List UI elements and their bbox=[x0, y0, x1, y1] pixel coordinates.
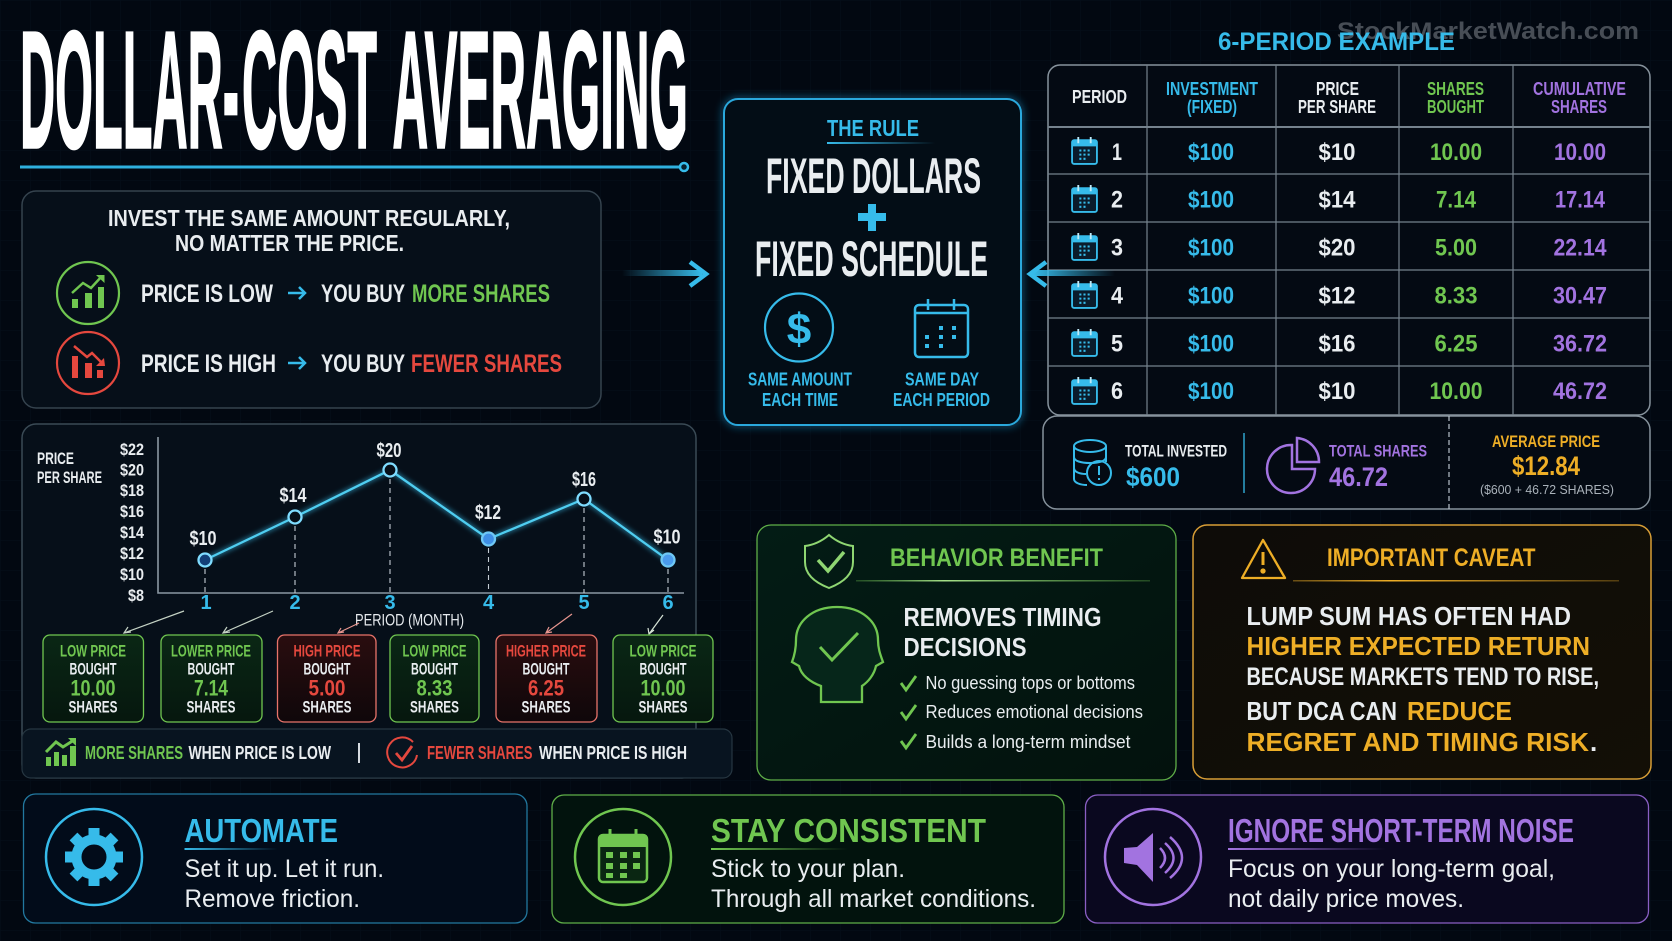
table header: BOUGHT bbox=[1427, 97, 1484, 117]
table row 2: 2 bbox=[1111, 186, 1123, 214]
y axis labels: $16 bbox=[120, 502, 144, 521]
y axis labels: $8 bbox=[128, 586, 144, 605]
y axis labels: $18 bbox=[120, 481, 144, 500]
icon: price high bbox=[57, 332, 119, 394]
panel: price chart bbox=[22, 424, 732, 778]
icon: head with check bbox=[792, 607, 883, 702]
row: price low: YOU BUY bbox=[321, 280, 405, 308]
table row 6: 46.72 bbox=[1553, 378, 1607, 405]
table row 4: 8.33 bbox=[1434, 282, 1478, 310]
y axis labels: $22 bbox=[120, 440, 144, 459]
rule heading: THE RULE bbox=[827, 115, 919, 141]
rule formula bbox=[755, 148, 988, 287]
table header: SHARES bbox=[1551, 97, 1607, 117]
table row 4: $12 bbox=[1318, 282, 1356, 310]
table row 2: $100 bbox=[1188, 186, 1234, 214]
card: period 1: SHARES bbox=[68, 698, 118, 716]
table row 5: 5 bbox=[1111, 330, 1123, 358]
table row 5: $100 bbox=[1188, 330, 1234, 358]
card: period 1: LOW PRICE bbox=[60, 642, 126, 660]
x axis labels: 3 bbox=[384, 592, 396, 614]
title: COST bbox=[242, 0, 377, 184]
card: period 4: LOW PRICE bbox=[402, 642, 466, 660]
point labels: $14 bbox=[280, 485, 307, 507]
line chart bbox=[158, 437, 684, 593]
card: period 5: SHARES bbox=[522, 698, 570, 716]
total shares: 46.72 bbox=[1329, 462, 1388, 492]
table row 6: 6 bbox=[1111, 378, 1123, 405]
table row 2 bbox=[1072, 185, 1606, 214]
consistent text: Stick to your plan. bbox=[711, 855, 905, 883]
benefit checklist bbox=[901, 673, 1143, 752]
card: period 5: HIGHER PRICE bbox=[506, 642, 586, 660]
card: period 4: 8.33 bbox=[416, 676, 452, 700]
point labels: $20 bbox=[376, 440, 402, 462]
text: AVERAGING bbox=[392, 0, 688, 184]
benefit statement bbox=[904, 602, 1102, 662]
noise text: Focus on your long-term goal, bbox=[1228, 855, 1555, 883]
caveat text: REGRET AND TIMING RISK bbox=[1246, 727, 1589, 757]
y axis labels: $10 bbox=[120, 565, 144, 584]
automate text: Remove friction. bbox=[184, 885, 360, 913]
point labels bbox=[190, 440, 680, 550]
icon: price low bbox=[57, 262, 119, 324]
x axis labels: 5 bbox=[578, 592, 590, 614]
card: period 2: BOUGHT bbox=[188, 660, 235, 678]
total shares: TOTAL SHARES bbox=[1329, 442, 1427, 460]
table row 3: 3 bbox=[1111, 234, 1123, 262]
table row 2: 7.14 bbox=[1436, 186, 1477, 214]
table row 2: $14 bbox=[1318, 186, 1356, 214]
heading: 6-period example: 6-PERIOD EXAMPLE bbox=[1218, 28, 1455, 56]
table row 1: 1 bbox=[1112, 139, 1122, 166]
row: price high: PRICE IS HIGH bbox=[141, 350, 276, 378]
consistent text: STAY CONSISTENT bbox=[711, 812, 986, 849]
average price: ($600 + 46.72 SHARES) bbox=[1480, 482, 1614, 497]
benefit statement: DECISIONS bbox=[904, 632, 1026, 662]
point labels: $16 bbox=[572, 469, 596, 491]
legend strip bbox=[22, 729, 732, 778]
title: DOLLAR- bbox=[20, 0, 239, 184]
card: period 2 bbox=[161, 635, 262, 722]
table row 1: $100 bbox=[1188, 139, 1234, 166]
row: price low: MORE SHARES bbox=[412, 280, 550, 308]
card: period 1: BOUGHT bbox=[70, 660, 117, 678]
consistent text bbox=[711, 812, 1036, 913]
automate text: AUTOMATE bbox=[184, 812, 338, 849]
caveat text: . bbox=[1590, 727, 1597, 757]
card: period 1: 10.00 bbox=[70, 676, 116, 700]
table row 1: $10 bbox=[1318, 139, 1356, 166]
point labels: $10 bbox=[654, 526, 680, 548]
automate text bbox=[184, 812, 384, 913]
card: period 3: BOUGHT bbox=[304, 660, 351, 678]
table row 3: $20 bbox=[1318, 234, 1356, 262]
table row 3: 5.00 bbox=[1435, 234, 1477, 262]
same amount label bbox=[748, 370, 852, 410]
table row 4: 4 bbox=[1111, 282, 1124, 310]
table row 6: $100 bbox=[1188, 378, 1234, 405]
table row 6: 10.00 bbox=[1430, 378, 1482, 405]
card: period 2: 7.14 bbox=[194, 676, 229, 700]
icon: gear bbox=[46, 809, 142, 905]
icon: calendar bbox=[915, 299, 968, 357]
table row 4 bbox=[1072, 281, 1607, 310]
total invested: TOTAL INVESTED bbox=[1125, 442, 1227, 460]
total shares bbox=[1329, 442, 1427, 492]
panel: automate bbox=[24, 794, 527, 923]
definition text: NO MATTER THE PRICE. bbox=[175, 230, 404, 256]
table bbox=[1048, 65, 1650, 415]
table header: PRICE bbox=[1316, 79, 1359, 99]
caveat text: LUMP SUM HAS OFTEN HAD bbox=[1246, 601, 1571, 631]
same amount label: EACH TIME bbox=[762, 390, 838, 410]
caveat text: HIGHER EXPECTED RETURN bbox=[1246, 631, 1590, 661]
row: price low: PRICE IS LOW bbox=[141, 280, 273, 308]
x axis labels bbox=[200, 592, 674, 614]
table row 3: 22.14 bbox=[1554, 234, 1607, 262]
table row 3: $100 bbox=[1188, 234, 1234, 262]
x axis labels: 4 bbox=[483, 592, 495, 614]
card: period 5: BOUGHT bbox=[522, 660, 570, 678]
panel: definition bbox=[22, 191, 601, 408]
card: period 4: SHARES bbox=[410, 698, 459, 716]
panel: ignore short-term noise bbox=[1086, 795, 1648, 923]
card: period 5: 6.25 bbox=[528, 676, 564, 700]
same amount label: SAME AMOUNT bbox=[748, 370, 852, 390]
point labels: $12 bbox=[475, 502, 501, 524]
panel: important caveat bbox=[1193, 525, 1651, 779]
legend strip: FEWER SHARES bbox=[427, 743, 532, 763]
card: period 6: 10.00 bbox=[640, 676, 686, 700]
legend strip: MORE SHARES bbox=[85, 743, 183, 763]
y axis labels: $14 bbox=[120, 523, 144, 542]
pointer arrows bbox=[124, 611, 663, 634]
x axis labels: 6 bbox=[662, 592, 674, 614]
table row 2: 17.14 bbox=[1555, 186, 1606, 214]
y axis labels bbox=[120, 440, 144, 605]
table row 4: 30.47 bbox=[1553, 282, 1607, 310]
rule formula: FIXED SCHEDULE bbox=[755, 231, 988, 287]
table row 5: $16 bbox=[1318, 330, 1356, 358]
card: period 6: BOUGHT bbox=[640, 660, 687, 678]
table header: INVESTMENT bbox=[1166, 79, 1258, 99]
caveat heading: IMPORTANT CAVEAT bbox=[1327, 544, 1536, 572]
legend strip: WHEN PRICE IS HIGH bbox=[539, 743, 687, 763]
card: period 2: SHARES bbox=[186, 698, 236, 716]
benefit checklist: Reduces emotional decisions bbox=[926, 702, 1143, 722]
table row 1: 10.00 bbox=[1430, 139, 1482, 166]
row: price low bbox=[141, 280, 550, 308]
total invested bbox=[1125, 442, 1227, 492]
arrow: into rule from right bbox=[1030, 262, 1115, 286]
card: period 3: SHARES bbox=[302, 698, 352, 716]
benefit statement: REMOVES TIMING bbox=[904, 602, 1102, 632]
icon: red check bbox=[387, 737, 417, 767]
same day label bbox=[893, 370, 990, 410]
arrow: into rule from left bbox=[622, 262, 706, 286]
benefit heading: BEHAVIOR BENEFIT bbox=[890, 544, 1103, 572]
same day label: SAME DAY bbox=[905, 370, 979, 390]
card: period 6: LOW PRICE bbox=[630, 642, 696, 660]
card: period 3: HIGH PRICE bbox=[294, 642, 360, 660]
consistent text: Through all market conditions. bbox=[711, 885, 1036, 913]
average price: $12.84 bbox=[1512, 451, 1580, 481]
benefit checklist: No guessing tops or bottoms bbox=[926, 673, 1135, 693]
same day label: EACH PERIOD bbox=[893, 390, 990, 410]
icon: dollar circle: $ bbox=[787, 305, 811, 354]
row: price high: FEWER SHARES bbox=[411, 350, 562, 378]
table row 4: $100 bbox=[1188, 282, 1234, 310]
definition text bbox=[108, 205, 510, 256]
axis title: PRICE bbox=[37, 449, 74, 468]
panel: totals summary bbox=[1043, 416, 1650, 509]
caveat text bbox=[1246, 601, 1599, 757]
table row 6 bbox=[1072, 377, 1607, 405]
card: period 1 bbox=[43, 635, 144, 722]
table row 5 bbox=[1072, 329, 1607, 358]
card: period 2: LOWER PRICE bbox=[171, 642, 251, 660]
caveat text: BUT DCA CAN bbox=[1246, 696, 1397, 726]
average price bbox=[1480, 432, 1614, 497]
table header: SHARES bbox=[1427, 79, 1484, 99]
icon: growth chart bbox=[46, 738, 76, 766]
icon: speaker bbox=[1105, 809, 1201, 905]
row: price high: YOU BUY bbox=[321, 350, 405, 378]
noise text bbox=[1228, 812, 1574, 913]
panel: behavior benefit bbox=[757, 525, 1176, 780]
y axis labels: $12 bbox=[120, 544, 144, 563]
table header: (FIXED) bbox=[1187, 97, 1237, 117]
table row 3 bbox=[1072, 233, 1607, 262]
axis title bbox=[37, 449, 102, 487]
card: period 6: SHARES bbox=[638, 698, 688, 716]
noise text: not daily price moves. bbox=[1228, 885, 1464, 913]
legend strip: WHEN PRICE IS LOW bbox=[188, 743, 331, 763]
table header: PERIOD bbox=[1072, 87, 1127, 107]
table row 5: 36.72 bbox=[1553, 330, 1607, 358]
row: price high bbox=[141, 350, 562, 378]
icon: pie chart bbox=[1267, 438, 1319, 493]
icon: shield bbox=[805, 535, 853, 588]
definition text: INVEST THE SAME AMOUNT REGULARLY, bbox=[108, 205, 510, 231]
total invested: $600 bbox=[1126, 462, 1180, 492]
icon: calendar bbox=[575, 809, 671, 905]
table header: PER SHARE bbox=[1298, 97, 1376, 117]
average price: AVERAGE PRICE bbox=[1492, 432, 1600, 451]
x axis labels: 2 bbox=[289, 592, 301, 614]
table row 5: 6.25 bbox=[1434, 330, 1478, 358]
rule formula: FIXED DOLLARS bbox=[766, 148, 981, 204]
table header: CUMULATIVE bbox=[1533, 79, 1626, 99]
watermark: StockMarketWatch.com bbox=[1337, 18, 1639, 45]
benefit checklist: Builds a long-term mindset bbox=[926, 732, 1130, 752]
card: period 4: BOUGHT bbox=[411, 660, 458, 678]
card: period 3 bbox=[278, 635, 376, 722]
y axis labels: $20 bbox=[120, 460, 144, 480]
card: period 4 bbox=[390, 635, 479, 722]
card: period 3: 5.00 bbox=[308, 676, 346, 700]
table row 1 bbox=[1072, 137, 1606, 166]
icon: dollar circle bbox=[765, 294, 833, 362]
table row 1: 10.00 bbox=[1554, 139, 1606, 166]
axis title: PER SHARE bbox=[37, 468, 102, 487]
x axis labels: 1 bbox=[200, 592, 212, 614]
x axis title: PERIOD (MONTH) bbox=[355, 610, 464, 630]
automate text: Set it up. Let it run. bbox=[184, 855, 384, 883]
caveat text: REDUCE bbox=[1407, 696, 1512, 726]
point labels: $10 bbox=[190, 528, 216, 550]
card: period 6 bbox=[613, 635, 713, 722]
icon: coins bbox=[1074, 440, 1111, 485]
panel: stay consistent bbox=[552, 795, 1064, 923]
table header bbox=[1072, 79, 1626, 117]
panel: the rule bbox=[724, 99, 1021, 425]
icon: warning triangle bbox=[1242, 540, 1285, 578]
card: period 5 bbox=[496, 635, 597, 722]
table row 6: $10 bbox=[1318, 378, 1356, 405]
